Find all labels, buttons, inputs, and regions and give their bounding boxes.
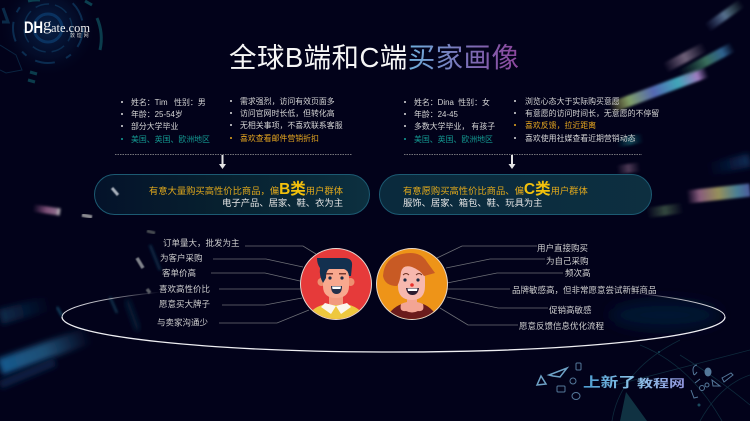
icon: male buyer avatar bbox=[300, 248, 372, 320]
B-end trait labels: 订单量大，批发为主 bbox=[163, 238, 240, 248]
bullet list: B-end basic info: 部分大学毕业 bbox=[131, 121, 178, 131]
bullet list: C-end basic info: 姓名：Dina 性别：女 bbox=[414, 97, 490, 107]
panel: B-end buyer profile bbox=[94, 96, 370, 214]
bullet list: C-end basic info: 美国、英国、欧洲地区 bbox=[414, 134, 493, 144]
C-end trait labels bbox=[512, 243, 657, 331]
arrow: down to B summary bbox=[219, 155, 226, 169]
title: 全球B端和C端买家画像 bbox=[229, 42, 519, 73]
C-end trait labels: 用户直接购买 bbox=[537, 243, 588, 253]
bullet list: B-end behaviour: 访问官网时长低，但转化高 bbox=[240, 108, 335, 118]
left trait connector lines bbox=[211, 246, 316, 323]
right trait connector lines bbox=[437, 246, 563, 325]
bullet list: C-end behaviour: 有意愿的访问时间长，无意愿的不停留 bbox=[525, 108, 659, 118]
B-end trait labels: 为客户采购 bbox=[160, 253, 203, 263]
icon: female buyer avatar bbox=[376, 248, 448, 320]
C-end trait labels: 愿意反馈信息优化流程 bbox=[519, 321, 605, 331]
HUD circle decoration bbox=[0, 0, 101, 82]
callout: C-type summary bbox=[380, 174, 652, 214]
bullet list: B-end basic info: 姓名：Tim 性别：男 bbox=[131, 97, 206, 107]
B-end trait labels bbox=[157, 238, 240, 328]
icons: left product outlines bbox=[537, 363, 581, 400]
C-end trait labels: 为自己采购 bbox=[546, 256, 589, 266]
bullet list: C-end basic info: 年龄：24-45 bbox=[414, 109, 458, 119]
bullet list: B-end behaviour: 无相关事项，不喜欢联系客服 bbox=[240, 120, 343, 130]
B-end trait labels: 与卖家沟通少 bbox=[157, 318, 209, 328]
callout: C-type summary: 有意愿购买高性价比商品、偏C类用户群体 bbox=[403, 180, 588, 198]
bullet list: C-end behaviour bbox=[514, 96, 659, 143]
C-end trait labels: 频次高 bbox=[565, 268, 591, 278]
bullet list: B-end behaviour: 需求强烈，访问有效页面多 bbox=[240, 96, 335, 106]
watermark: 上新了教程网 bbox=[537, 363, 733, 400]
watermark: 上新了教程网: 上新了 bbox=[583, 374, 636, 390]
watermark: 上新了教程网: 教程网 bbox=[637, 376, 685, 390]
bullet list: C-end basic info bbox=[404, 97, 495, 144]
bullet list: C-end basic info: 多数大学毕业， 有孩子 bbox=[414, 121, 495, 131]
logo: DHgate.com bbox=[24, 15, 90, 39]
callout: B-type summary bbox=[94, 174, 370, 214]
bullet list: C-end behaviour: 浏览心态大于实际购买意愿 bbox=[525, 96, 620, 106]
bullet list: B-end behaviour bbox=[230, 96, 343, 143]
logo: DHgate.com: 敦煌网 bbox=[70, 32, 90, 39]
platform ellipse bbox=[62, 282, 725, 352]
light streaks: left bbox=[0, 208, 160, 385]
logo: DHgate.com: ate.com bbox=[51, 20, 90, 35]
light streaks: right bbox=[610, 3, 750, 213]
B-end trait labels: 客单价高 bbox=[162, 268, 196, 278]
arrow: down to C summary bbox=[508, 155, 516, 169]
bullet list: B-end behaviour: 喜欢查看邮件营销折扣 bbox=[240, 133, 319, 143]
callout: B-type summary: 有意大量购买高性价比商品，偏B类用户群体 bbox=[149, 180, 344, 198]
bullet list: B-end basic info bbox=[121, 97, 210, 144]
B-end trait labels: 愿意买大牌子 bbox=[159, 299, 211, 309]
B-end trait labels: 喜欢高性价比 bbox=[159, 284, 210, 294]
bullet list: B-end basic info: 年龄：25-54岁 bbox=[131, 109, 183, 119]
bullet list: B-end basic info: 美国、英国、欧洲地区 bbox=[131, 134, 210, 144]
logo: DHgate.com: g bbox=[43, 15, 52, 34]
panel: C-end buyer profile bbox=[380, 96, 659, 214]
network backdrop bbox=[612, 340, 750, 421]
C-end trait labels: 品牌敏感高，但非常愿意尝试新鲜商品 bbox=[512, 285, 657, 295]
bullet list: C-end behaviour: 喜欢反馈，拉近距离 bbox=[525, 120, 596, 130]
icons: right product outlines bbox=[691, 365, 733, 398]
callout: B-type summary: 电子产品、居家、鞋、衣为主 bbox=[222, 197, 343, 208]
logo: DHgate.com: DH bbox=[24, 18, 43, 37]
callout: C-type summary: 服饰、居家、箱包、鞋、玩具为主 bbox=[403, 197, 542, 208]
bullet list: C-end behaviour: 喜欢使用社媒查看近期营销动态 bbox=[525, 133, 636, 143]
C-end trait labels: 促销高敏感 bbox=[549, 305, 592, 315]
